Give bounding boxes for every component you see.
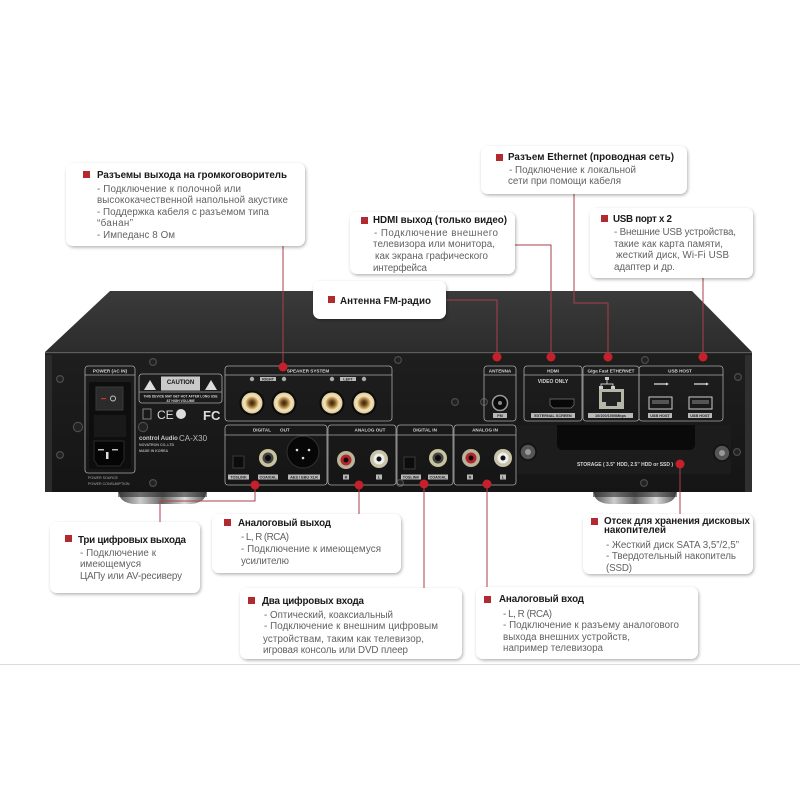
- analog in panel: L: [502, 476, 505, 480]
- analog out panel: ANALOG OUT: [355, 428, 386, 432]
- callout: HDMI output: интерфейса: [373, 263, 428, 274]
- bottom divider: [0, 664, 800, 665]
- digital in panel: [397, 425, 453, 485]
- callout: storage bay: накопителей: [604, 525, 666, 536]
- digital out panel: AES / EBU XLR: [290, 476, 318, 480]
- storage bay: [518, 425, 731, 474]
- caution label: CAUTION: [167, 380, 194, 386]
- callout: analog input: Аналоговый вход: [499, 594, 585, 605]
- callout: two digital inputs: Два цифровых входа: [262, 596, 365, 607]
- callout: USB ports: USB порт х 2: [613, 214, 673, 225]
- callout: three digital outputs: [50, 522, 200, 593]
- callout: analog output: Аналоговый выход: [238, 518, 332, 529]
- caution label: [139, 374, 222, 403]
- brand plate text: [139, 434, 208, 453]
- USB host panel: USB HOST: [668, 368, 692, 374]
- ethernet panel: [583, 366, 639, 421]
- analog in panel: ANALOG IN: [472, 428, 499, 432]
- callout: speaker outputs: [66, 163, 305, 246]
- certification marks: CE: [157, 408, 174, 422]
- callout: analog output: усилителю: [241, 556, 289, 567]
- connector lines and dots: [160, 194, 708, 588]
- callout: speaker outputs: “банан”: [97, 218, 133, 229]
- digital out panel: TOSLINK: [230, 476, 247, 480]
- storage bay: STORAGE ( 3.5" HDD, 2.5" HDD or SSD ): [577, 462, 673, 468]
- callout: speaker outputs: высококачественной напольной акустике: [97, 195, 289, 206]
- device feet: [118, 490, 677, 504]
- callout: HDMI output: [350, 212, 515, 274]
- HDMI panel: EXTERNAL SCREEN: [534, 414, 572, 418]
- callout: USB ports: [590, 208, 753, 278]
- digital out panel: [225, 425, 327, 485]
- callout: two digital inputs: - Оптический, коаксиальный: [264, 610, 393, 621]
- callout: HDMI output: как экрана графического: [375, 251, 489, 262]
- callout: HDMI output: телевизора или монитора,: [373, 239, 495, 250]
- callout: three digital outputs: ЦАПу или AV-ресиверу: [80, 571, 182, 582]
- callout: analog input: например телевизора: [503, 643, 604, 654]
- callout: Ethernet: сети при помощи кабеля: [508, 176, 621, 187]
- digital out panel: OUT: [280, 428, 290, 432]
- power inlet panel: [85, 366, 135, 486]
- speaker system panel: [225, 366, 392, 421]
- callout: two digital inputs: [240, 588, 462, 659]
- callout: USB ports: - Внешние USB устройства,: [614, 227, 736, 238]
- analog out panel: L: [378, 476, 381, 480]
- callout: USB ports: такие как карта памяти,: [614, 239, 723, 250]
- digital in panel: TOSLINK: [403, 476, 420, 480]
- callout: speaker outputs: Разъемы выхода на громкоговоритель: [97, 170, 287, 181]
- speaker system panel: LEFT: [343, 377, 353, 381]
- callout: analog output: - L, R (RCA): [241, 532, 289, 543]
- power inlet panel: POWER CONSUMPTION: [88, 482, 130, 486]
- power inlet panel: POWER (AC IN): [93, 368, 128, 374]
- USB host panel: USB HOST: [690, 414, 710, 418]
- device rear panel: [45, 352, 752, 492]
- caution label: AT HIGH VOLUME: [166, 399, 195, 403]
- certification marks: FC: [203, 408, 221, 423]
- callout: two digital inputs: - Подключение к внешним цифровым: [264, 621, 438, 632]
- callout: analog input: выхода внешних устройств,: [503, 632, 630, 643]
- brand plate text: MADE IN KOREA: [139, 449, 169, 453]
- callout: analog input: [476, 587, 698, 659]
- callout: analog input: - Подключение к разъему аналогового: [503, 620, 680, 631]
- panel screws: [57, 357, 741, 486]
- callout: speaker outputs: - Поддержка кабеля с разъемом типа: [97, 207, 270, 218]
- callout: three digital outputs: имеющемуся: [80, 559, 141, 570]
- ethernet panel: 10/100/1000Mbps: [595, 414, 626, 418]
- power inlet panel: POWER SOURCE: [88, 476, 119, 480]
- digital out panel: COAXIAL: [259, 476, 277, 480]
- callout: HDMI output: HDMI выход (только видео): [373, 215, 507, 226]
- analog out panel: [328, 425, 396, 485]
- ethernet panel: Giga Fast ETHERNET: [588, 368, 635, 374]
- HDMI panel: [524, 366, 582, 421]
- callout: analog input: - L, R (RCA): [503, 609, 552, 620]
- callout: storage bay: Отсек для хранения дисковых: [604, 516, 751, 527]
- callout: storage bay: [583, 514, 753, 574]
- certification marks: [143, 408, 221, 423]
- callout: three digital outputs: Три цифровых выхода: [78, 535, 187, 546]
- callout: three digital outputs: - Подключение к: [80, 548, 157, 559]
- callout: storage bay: - Жесткий диск SATA 3,5”/2,5”: [606, 540, 739, 551]
- caution label: THIS DEVICE MAY GET HOT AFTER LONG USE: [143, 394, 218, 398]
- callout: speaker outputs: - Подключение к полочной или: [97, 184, 241, 195]
- callout: storage bay: - Твердотельный накопитель: [606, 551, 736, 562]
- callout: FM antenna: [313, 281, 446, 319]
- callout: speaker outputs: - Импеданс 8 Ом: [97, 230, 175, 241]
- callout: FM antenna: Антенна FM-радио: [340, 296, 431, 307]
- digital in panel: COAXIAL: [429, 476, 447, 480]
- callout: Ethernet: - Подключение к локальной: [509, 165, 636, 176]
- brand plate text: CA-X30: [179, 434, 208, 443]
- device top surface: [45, 291, 752, 352]
- callout: two digital inputs: игровая консоль или DVD плеер: [263, 645, 409, 656]
- callout: Ethernet: Разъем Ethernet (проводная сеть): [508, 152, 674, 163]
- callout: storage bay: (SSD): [606, 563, 632, 574]
- USB host panel: USB HOST: [650, 414, 670, 418]
- callout: USB ports: жесткий диск, Wi-Fi USB: [616, 250, 729, 261]
- USB host panel: [639, 366, 723, 421]
- speaker system panel: SPEAKER SYSTEM: [287, 368, 329, 374]
- callout: USB ports: адаптер и др.: [614, 262, 675, 273]
- brand plate text: NOVATRON CO.,LTD: [139, 443, 175, 447]
- speaker system panel: RIGHT: [262, 377, 275, 381]
- callout: analog output: - Подключение к имеющемуся: [241, 544, 381, 555]
- HDMI panel: VIDEO ONLY: [538, 379, 569, 385]
- callout: Ethernet: [481, 146, 687, 194]
- digital in panel: DIGITAL IN: [413, 428, 438, 432]
- HDMI panel: HDMI: [547, 368, 559, 374]
- analog in panel: R: [469, 476, 472, 480]
- antenna panel: FM: [497, 414, 503, 418]
- antenna panel: ANTENNA: [489, 368, 512, 374]
- callout: HDMI output: - Подключение внешнего: [374, 228, 499, 239]
- brand plate text: control Audio: [139, 436, 178, 442]
- digital out panel: DIGITAL: [253, 428, 271, 432]
- analog in panel: [454, 425, 516, 485]
- antenna panel: [484, 366, 516, 421]
- callout: analog output: [212, 514, 401, 573]
- callout: two digital inputs: устройствам, таким как телевизор,: [263, 634, 424, 645]
- device: Novatron CA-X30 rear view: [45, 291, 752, 504]
- analog out panel: R: [345, 476, 348, 480]
